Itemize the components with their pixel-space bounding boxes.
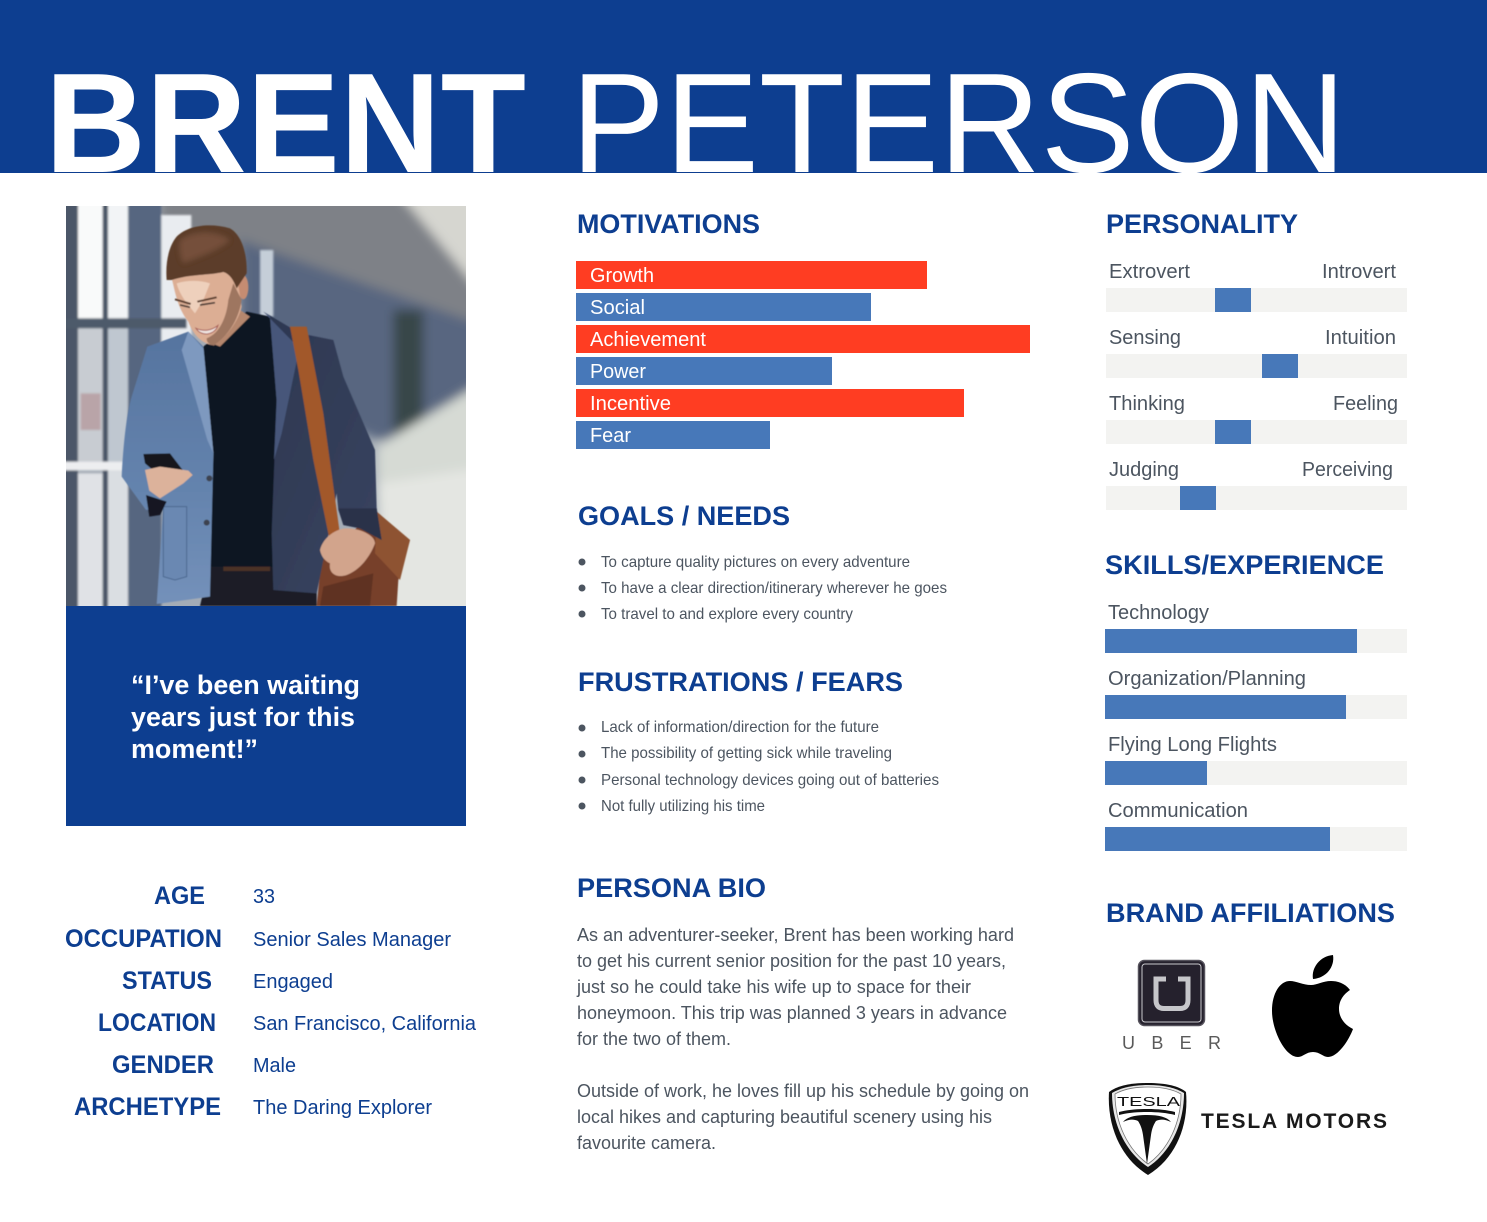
text block: persona bio: honeymoon. This trip was planned 3 years in advance — [577, 1003, 1007, 1023]
chart: personality sliders: Introvert — [1322, 261, 1396, 283]
chart: skills bars: Communication — [1108, 800, 1248, 822]
bar chart: motivations: Power — [590, 361, 646, 383]
text block: persona bio: As an adventurer-seeker, Brent has been working hard — [577, 925, 1014, 945]
text block: persona bio: to get his current senior position for the past 10 years, — [577, 951, 1006, 971]
list: goals: To have a clear direction/itinerary wherever he goes — [601, 580, 947, 597]
icon: uber logo: UBER — [1122, 1033, 1221, 1053]
quote text — [131, 670, 360, 764]
heading: goals / needs: GOALS / NEEDS — [578, 501, 790, 531]
demographics table: Engaged — [253, 971, 333, 993]
quote text: “I’ve been waiting — [131, 670, 360, 700]
heading: skills/experience: SKILLS/EXPERIENCE — [1105, 550, 1384, 580]
jacket right — [263, 312, 382, 593]
text block: persona bio: Outside of work, he loves fill up his schedule by going on — [577, 1081, 1029, 1101]
list: goals: To travel to and explore every country — [601, 606, 853, 623]
demographics table: Senior Sales Manager — [253, 929, 451, 951]
list: frustrations: Lack of information/direction for the future — [601, 719, 879, 736]
text block: persona bio: local hikes and capturing beautiful scenery using his — [577, 1107, 992, 1127]
heading: personality: PERSONALITY — [1106, 209, 1298, 239]
demographics table: LOCATION — [98, 1009, 216, 1037]
bar chart: motivations: Social — [590, 297, 645, 319]
heading: frustrations / fears: FRUSTRATIONS / FEARS — [578, 667, 903, 697]
list: frustrations: Not fully utilizing his time — [601, 798, 765, 815]
bag — [317, 512, 410, 606]
demographics table: Male — [253, 1055, 296, 1077]
title: Brent Peterson: PETERSON — [571, 44, 1346, 203]
heading: brand affiliations: BRAND AFFILIATIONS — [1106, 898, 1395, 928]
ear — [238, 275, 248, 299]
jeans — [200, 563, 317, 606]
demographics table: The Daring Explorer — [253, 1097, 432, 1119]
chart: personality sliders: Thinking — [1109, 393, 1185, 415]
hand right — [320, 528, 375, 576]
list: goals: To capture quality pictures on every adventure — [601, 554, 910, 571]
heading: motivations: MOTIVATIONS — [577, 209, 760, 239]
chart: personality sliders: Judging — [1109, 459, 1179, 481]
text block: persona bio: for the two of them. — [577, 1029, 731, 1049]
icon: uber logo — [1122, 960, 1221, 1053]
person — [122, 225, 410, 606]
list: frustrations: Personal technology devices going out of batteries — [601, 772, 939, 789]
bar chart: motivations: Incentive — [590, 393, 671, 415]
list: frustrations: The possibility of getting sick while traveling — [601, 745, 892, 762]
title: Brent Peterson — [54, 72, 1334, 173]
demographics table: 33 — [253, 886, 275, 908]
chart: personality sliders: Perceiving — [1302, 459, 1393, 481]
bar chart: motivations — [576, 261, 1030, 449]
quote panel — [66, 606, 466, 826]
icon: tesla logo: TESLA — [1117, 1095, 1181, 1109]
header banner — [0, 0, 1487, 173]
demographics table — [65, 882, 477, 1121]
demographics table: San Francisco, California — [253, 1013, 477, 1035]
demographics table: STATUS — [122, 967, 212, 995]
jacket left — [122, 332, 213, 604]
chart: personality sliders — [1106, 261, 1407, 510]
phone and hand — [142, 452, 183, 470]
brows and eyes — [175, 297, 217, 304]
bar chart: motivations: Growth — [590, 265, 654, 287]
list: goals — [578, 554, 947, 623]
text block: persona bio — [576, 925, 1029, 1153]
chart: skills bars: Flying Long Flights — [1108, 734, 1277, 756]
chart: personality sliders: Sensing — [1109, 327, 1181, 349]
chart: skills bars — [1105, 602, 1407, 851]
face — [172, 270, 242, 345]
icon: tesla logo: TESLA MOTORS — [1201, 1110, 1387, 1133]
neck — [203, 310, 250, 347]
hair — [166, 225, 247, 288]
chart: skills bars: Technology — [1108, 602, 1209, 624]
photo: man using phone in corridor — [66, 206, 466, 606]
bar chart: motivations: Fear — [590, 425, 631, 447]
chart: skills bars: Organization/Planning — [1108, 668, 1306, 690]
mouth — [196, 325, 218, 334]
strap — [290, 327, 342, 550]
demographics table: OCCUPATION — [65, 925, 222, 953]
icon: apple logo — [1272, 955, 1353, 1057]
sweater — [203, 312, 277, 567]
chart: personality sliders: Feeling — [1333, 393, 1398, 415]
text block: persona bio: just so he could take his wife up to space for their — [576, 977, 971, 997]
text block: persona bio: favourite camera. — [577, 1133, 716, 1153]
demographics table: GENDER — [112, 1051, 214, 1079]
bar chart: motivations: Achievement — [590, 329, 706, 351]
chart: personality sliders: Intuition — [1325, 327, 1396, 349]
icon: tesla logo — [1109, 1083, 1387, 1175]
title: Brent Peterson: BRENT — [45, 44, 526, 203]
demographics table: ARCHETYPE — [74, 1093, 221, 1121]
heading: persona bio: PERSONA BIO — [577, 873, 766, 903]
quote text: years just for this — [131, 702, 355, 732]
quote text: moment!” — [131, 734, 258, 764]
demographics table: AGE — [154, 882, 205, 910]
list: frustrations — [578, 719, 939, 815]
chart: personality sliders: Extrovert — [1109, 261, 1190, 283]
